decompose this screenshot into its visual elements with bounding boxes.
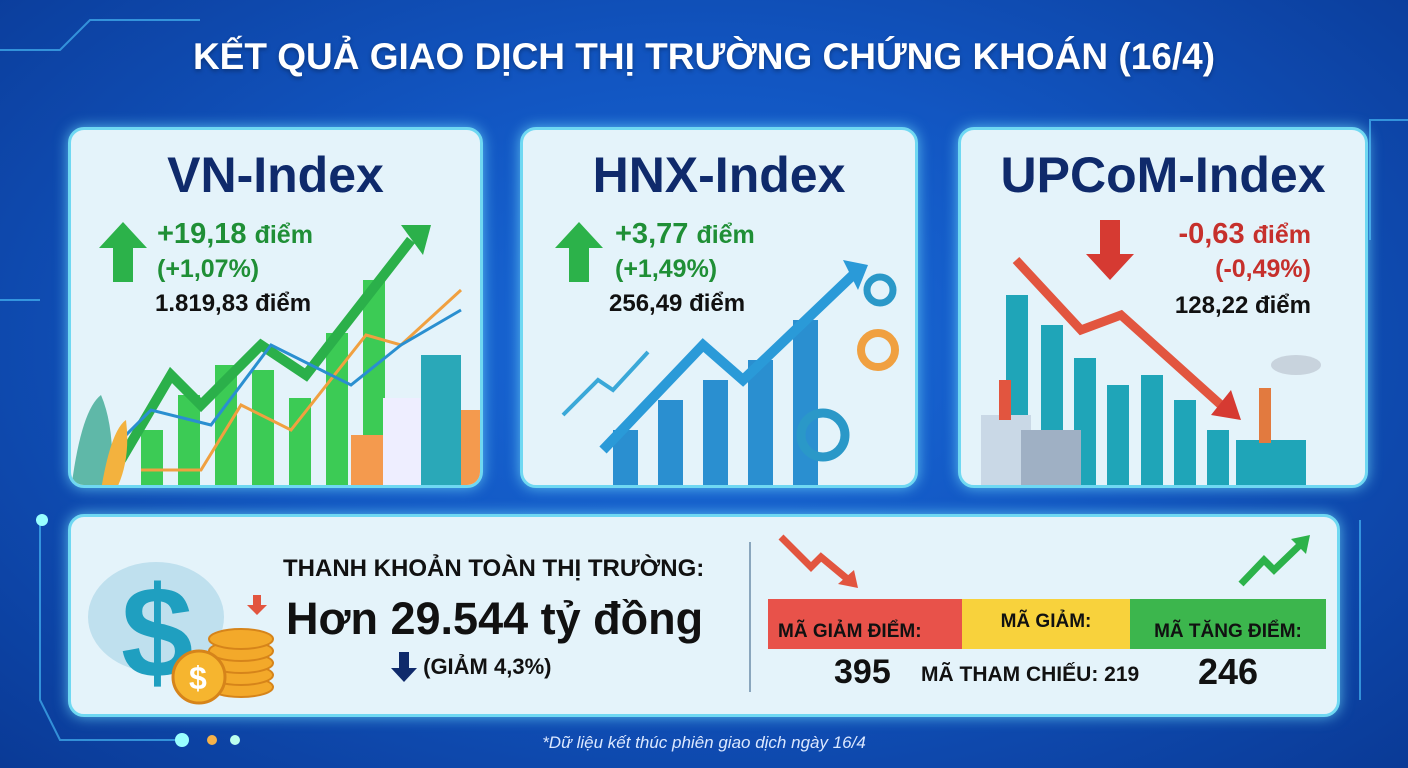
icon: up arrow	[555, 222, 603, 282]
icon: dollar and coins	[88, 559, 274, 705]
value: 1.819,83 điểm	[155, 290, 311, 317]
heading: UPCoM-Index: UPCoM-Index	[1000, 147, 1326, 203]
heading: HNX-Index: HNX-Index	[593, 147, 845, 203]
value: 128,22 điểm	[1175, 292, 1311, 319]
icon: dollar and coins: $	[121, 559, 193, 705]
liquidity change: (GIẢM 4,3%)	[423, 654, 551, 679]
change text: (+1,49%)	[615, 255, 717, 283]
panel: HNX-Index	[520, 127, 918, 488]
title: KẾT QUẢ GIAO DỊCH THỊ TRƯỜNG CHỨNG KHOÁN (16/4)	[193, 36, 1215, 77]
change text: (+1,07%)	[157, 255, 259, 283]
icon: up arrow	[99, 222, 147, 282]
change text	[157, 218, 313, 283]
change text: (-0,49%)	[1215, 255, 1311, 283]
breadth bar: MÃ GIẢM:	[1001, 611, 1091, 632]
icon: down arrow	[1086, 220, 1134, 280]
breadth bar: MÃ TĂNG ĐIỂM:	[1154, 621, 1302, 642]
icon: green zigzag up arrow	[1238, 535, 1310, 586]
change text: -0,63 điểm	[1178, 218, 1311, 250]
panel: liquidity & breadth	[68, 514, 1340, 717]
divider	[749, 542, 751, 692]
liquidity value: Hơn 29.544 tỷ đồng	[286, 593, 703, 644]
heading: VN-Index: VN-Index	[167, 147, 384, 203]
change text: +3,77 điểm	[615, 218, 755, 250]
change text	[615, 218, 755, 283]
breadth bar	[768, 599, 1326, 649]
breadth bar: MÃ GIẢM ĐIỂM:	[778, 621, 922, 642]
liquidity label: THANH KHOẢN TOÀN THỊ TRƯỜNG:	[283, 555, 704, 582]
chart: VN-Index	[72, 225, 480, 485]
panel: VN-Index	[68, 127, 483, 488]
chart: UPCoM	[981, 257, 1321, 485]
footnote: *Dữ liệu kết thúc phiên giao dịch ngày 16/4	[542, 733, 866, 752]
liquidity change	[391, 652, 551, 682]
change text	[1178, 218, 1311, 283]
reference count: MÃ THAM CHIẾU: 219	[921, 663, 1139, 686]
decliners count: 395	[834, 653, 891, 691]
change text: +19,18 điểm	[157, 218, 313, 250]
value: 256,49 điểm	[609, 290, 745, 317]
icon: dollar and coins: $	[189, 660, 207, 696]
panel: UPCoM-Index	[958, 127, 1368, 488]
icon: red zigzag down arrow	[778, 534, 858, 588]
chart: HNX	[562, 260, 899, 485]
advancers count: 246	[1198, 651, 1258, 692]
